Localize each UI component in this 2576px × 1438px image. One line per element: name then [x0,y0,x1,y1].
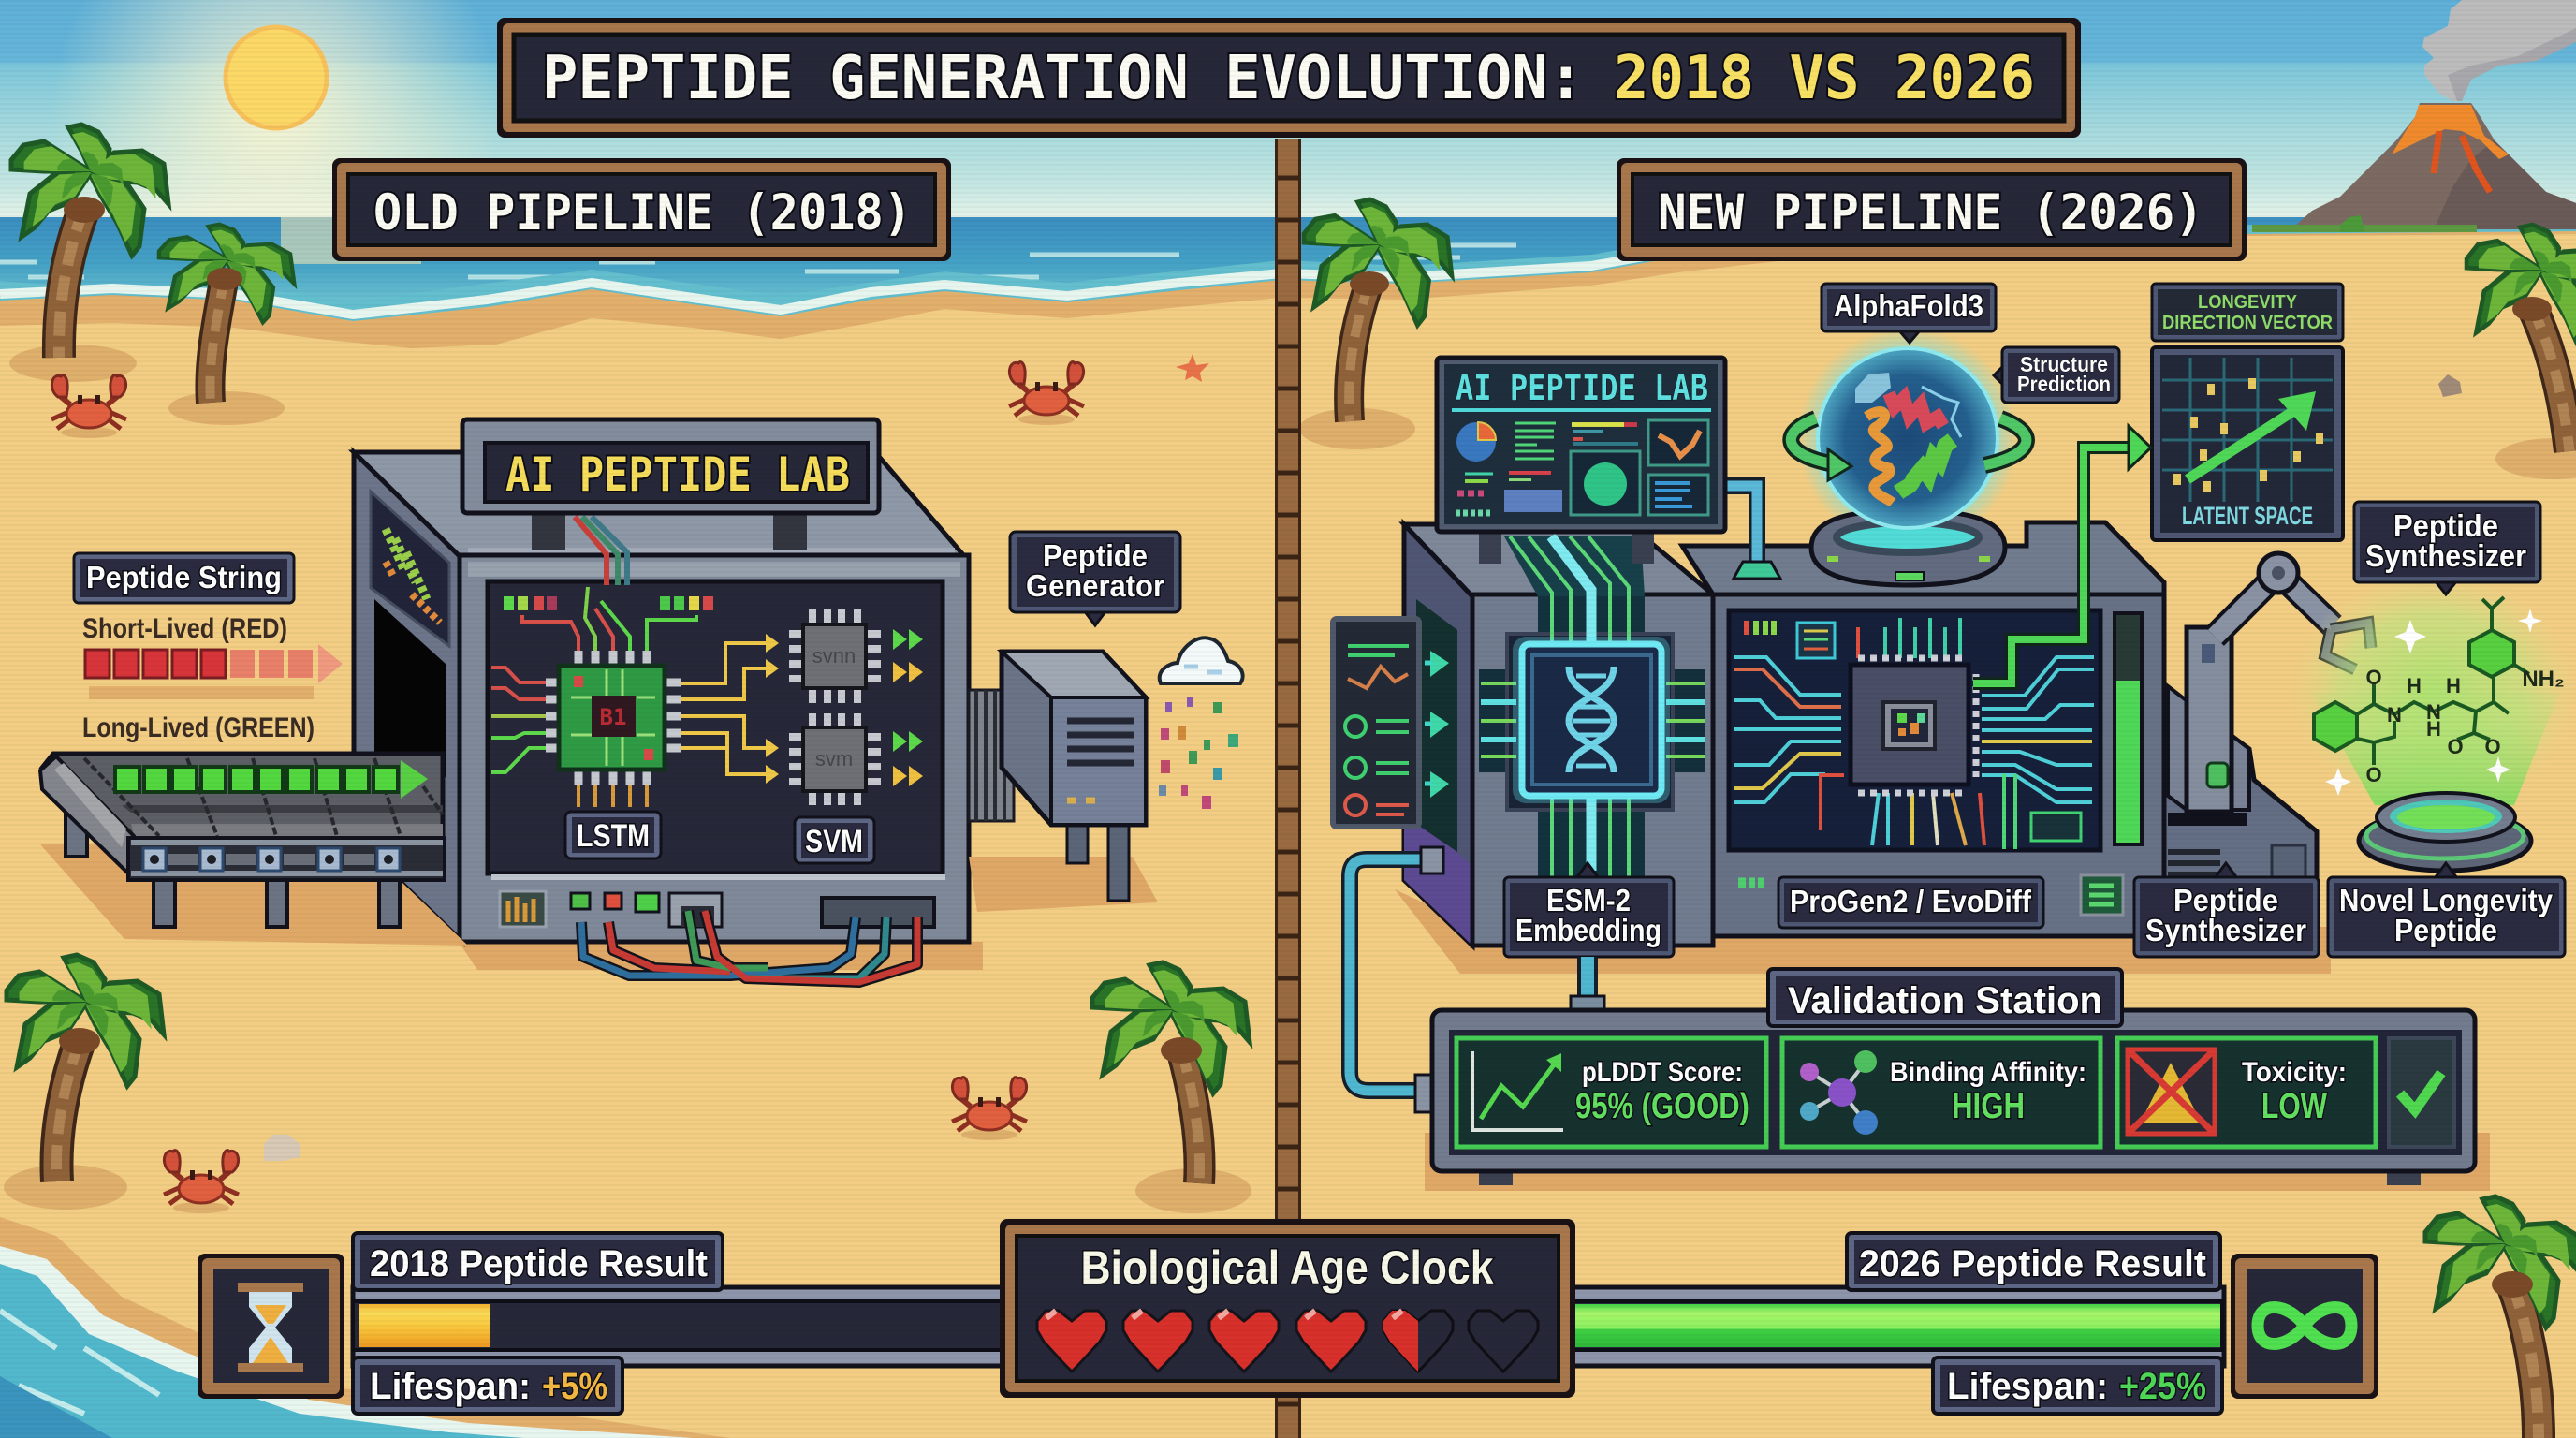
palm tree 7 [2425,1196,2576,1438]
label: lifespan +25%: +25% [2119,1366,2206,1407]
svn chip top [789,609,881,703]
label: SVM: SVM [805,824,863,859]
clock title: Biological Age Clock [1080,1241,1494,1294]
pipes into validation station [1350,847,1604,1112]
label: longevity direction vector [2152,284,2343,341]
title text yellow: 2018 VS 2026 [1614,44,2035,113]
title banner [497,18,2081,138]
label: LSTM [565,812,661,858]
conveyor legs [66,805,400,927]
heading: old pipeline [332,158,951,261]
rotation arrows [1791,418,2027,480]
belt surface [42,754,443,836]
rail [128,838,445,880]
chart: latent space: LATENT SPACE [2182,502,2313,530]
cell: pLDDT score: pLDDT Score: [1582,1057,1743,1088]
cyan data stream [1481,536,1705,877]
circuit board traces [1734,618,2094,849]
cell: check mark [2389,1038,2454,1147]
claw [2325,623,2371,669]
synthesized molecule and dish [2291,571,2576,871]
label: lifespan +5%: Lifespan: [370,1366,531,1407]
AlphaFold3 structure prediction sphere [1791,328,2027,585]
AI peptide lab monitor [1437,358,1725,564]
label: AI peptide lab sign [462,419,879,585]
cell: toxicity: LOW [2261,1087,2327,1126]
palm tree 2 [159,225,294,425]
title text white: PEPTIDE GENERATION EVOLUTION: [542,44,1584,113]
label: AI peptide lab sign: AI PEPTIDE LAB [505,448,850,502]
LSTM chip: B1 [600,704,626,730]
pedestal [1811,510,2005,585]
input wires [491,587,696,772]
synthesized molecule and dish: O [2365,666,2382,689]
old pipeline lab machine [354,452,983,982]
callout: AlphaFold3 [1822,284,1996,343]
palm tree 6 [1092,962,1251,1213]
AI peptide lab monitor: AI PEPTIDE LAB [1456,368,1708,408]
conveyor belt [40,754,468,946]
callout: peptide synthesizer bottom: Synthesizer [2145,913,2306,947]
scattered peptide particles [1159,697,1238,809]
label: long-lived: Long-Lived (GREEN) [82,712,315,743]
cell: binding affinity: Binding Affinity: [1890,1057,2086,1088]
cell: binding affinity [1782,1038,2100,1147]
label: longevity direction vector: DIRECTION VECTOR [2162,313,2333,333]
callout: structure prediction [1994,347,2119,403]
molecule structure [2314,597,2529,765]
synthesized molecule and dish: H [2446,674,2461,697]
status LEDs [504,596,713,610]
robot arm synthesizer [2164,553,2371,936]
direction arrow [2188,391,2316,479]
callout: peptide generator: Generator [1026,568,1164,603]
panel: validation station [1425,1010,2490,1191]
chart: latent space [2152,347,2343,540]
dish [2359,793,2531,871]
protein ribbons [1866,387,1961,503]
callout: peptide synthesizer bottom: Peptide [2174,883,2278,917]
svm chip bottom: svm [815,747,853,770]
vertical divider post [1275,139,1301,1438]
label: validation station tab: Validation Station [1788,980,2102,1021]
svm chip bottom [789,713,881,805]
synthesized molecule and dish: N [2387,703,2402,726]
synthesized molecule and dish: H [2407,674,2422,697]
machine side [354,452,462,942]
palm tree 5 [4,955,164,1210]
central chip [1851,658,1976,793]
callout: peptide synthesizer top [2354,502,2540,594]
label: 2018 peptide result: 2018 Peptide Result [370,1243,708,1284]
output arrows [681,634,779,784]
side readout panel [1333,619,1419,827]
palm tree 4 [2466,225,2576,479]
label: ProGen2 / EvoDiff: ProGen2 / EvoDiff [1790,884,2032,918]
heading: new pipeline: NEW PIPELINE (2026) [1658,184,2203,242]
callout: peptide synthesizer top: Synthesizer [2365,538,2526,573]
callout: peptide generator [1010,532,1180,625]
label: peptide string [74,553,294,603]
LSTM chip [546,651,681,785]
control panel [500,891,934,927]
machine front [460,555,969,942]
green peptide string [115,760,428,799]
red peptide string [85,644,343,699]
machine top [354,452,965,559]
label: validation station tab [1768,969,2122,1026]
label: lifespan +5% [353,1357,622,1414]
icon: hourglass [198,1254,344,1399]
label: ProGen2 / EvoDiff [1778,877,2043,928]
label: peptide string: Peptide String [86,560,282,594]
callout: AlphaFold3: AlphaFold3 [1834,288,1983,323]
2018 result bar [353,1233,1008,1414]
pie chart [1456,422,1496,462]
machine opening [374,599,446,777]
shoreline bottom left [0,1217,730,1438]
green data pipe to latent space [1973,426,2151,683]
chip output chevrons [893,629,923,786]
sparkles [2325,609,2542,796]
callout: novel longevity peptide: Peptide [2394,913,2497,947]
palm tree 3 [1299,199,1452,449]
callout: novel longevity peptide [2328,863,2565,957]
palm tree 1 [9,125,168,382]
2026 result bar [1568,1233,2224,1414]
callout: novel longevity peptide: Novel Longevity [2339,883,2554,917]
seashell pebbles [264,374,2462,1161]
synthesized molecule and dish: N [2426,700,2441,724]
icon: infinity [2231,1254,2378,1399]
label: 2018 peptide result [353,1233,723,1290]
peptide generator box [969,652,1158,912]
middle module [1333,522,2164,936]
upper arm and forearm [2215,573,2333,637]
green gauge [2115,613,2142,844]
synthesized molecule and dish: H [2426,717,2441,741]
cell: toxicity [2117,1038,2376,1147]
label: lifespan +25% [1933,1357,2222,1414]
LSTM legs [578,785,647,807]
label: 2026 peptide result: 2026 Peptide Result [1859,1243,2206,1284]
synthesized molecule and dish: O [2447,735,2464,758]
DNA chip [1513,637,1670,803]
hearts [1037,1311,1538,1372]
icon: sun [226,27,327,128]
cell: pLDDT score: 95% (GOOD) [1575,1087,1749,1126]
synthesized molecule and dish: O [2484,735,2501,758]
small terminal icon [2081,875,2123,915]
callout: peptide synthesizer top: Peptide [2393,508,2498,543]
machine screen [488,581,943,873]
callout: structure prediction: Structure [2020,352,2108,376]
callout: ESM-2 embedding: ESM-2 [1546,883,1631,917]
synthesized molecule and dish: O [2365,763,2382,786]
crabs [51,362,1084,1213]
icon: starfish [1176,354,1209,382]
biological age clock [1000,1219,1575,1398]
label: LSTM: LSTM [577,818,650,854]
label: lifespan +25%: Lifespan: [1947,1366,2108,1407]
glass sphere [1818,348,1998,528]
callout: ESM-2 embedding [1504,863,1674,957]
cell: binding affinity: HIGH [1952,1087,2025,1126]
hanging cables [581,911,917,982]
heading: new pipeline [1617,158,2247,261]
callout: peptide generator: Peptide [1043,538,1148,573]
cell: pLDDT score [1456,1038,1766,1147]
svn chip top: svnn [812,644,856,668]
chip channels [1479,536,1705,877]
label: lifespan +5%: +5% [542,1366,607,1407]
synthesized molecule and dish: NH₂ [2522,667,2565,692]
callout: structure prediction: Prediction [2017,372,2111,396]
callout: ESM-2 embedding: Embedding [1515,913,1661,947]
icon: cloud of peptides [1160,638,1243,683]
heading: old pipeline: OLD PIPELINE (2018) [373,184,912,242]
volcano with smoke [2252,0,2576,232]
cell: toxicity: Toxicity: [2242,1057,2347,1088]
label: short-lived: Short-Lived (RED) [82,613,287,644]
roller edge [40,756,134,873]
callout: peptide synthesizer bottom [2134,863,2319,957]
label: SVM [795,817,874,863]
connector pipe: monitor to base [1727,486,1780,579]
label: 2026 peptide result [1847,1233,2220,1290]
label: longevity direction vector: LONGEVITY [2198,292,2298,313]
